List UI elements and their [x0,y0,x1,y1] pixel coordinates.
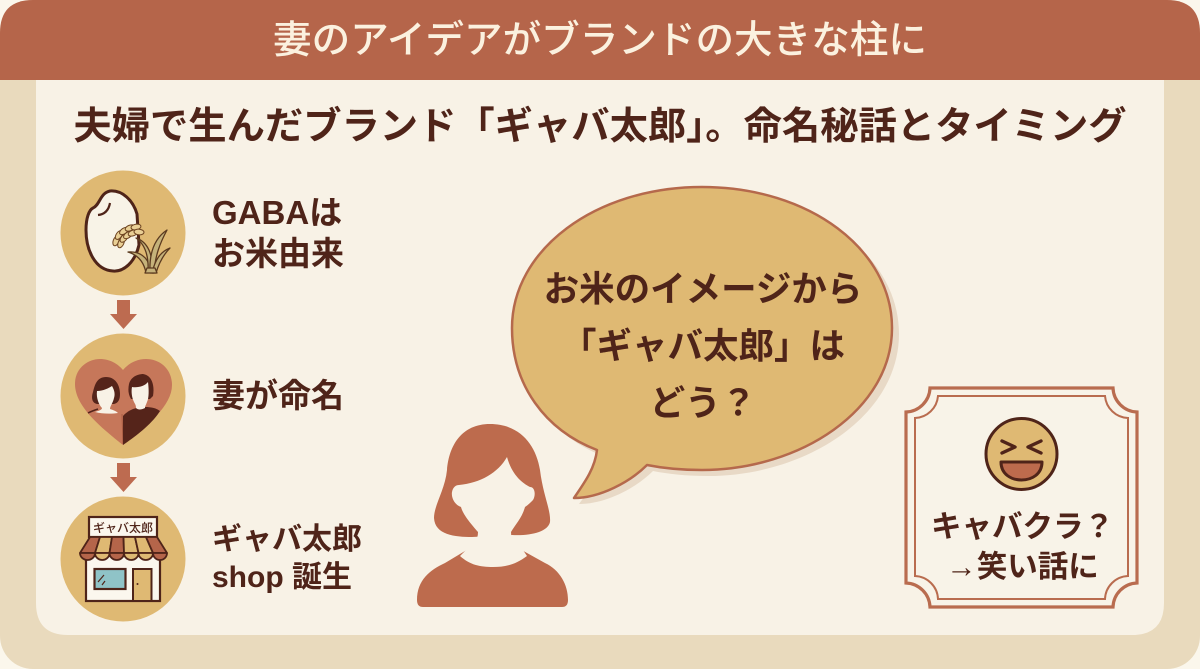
speech bubble text: どう？ [650,383,756,423]
arrow 2 [110,463,137,492]
speech bubble [512,187,899,504]
step circle: rice [60,170,186,296]
icon: laughing face [986,418,1057,490]
arrow 1 [110,300,137,329]
title: 妻のアイデアがブランドの大きな柱に [273,19,927,62]
icon: rice grain [86,191,139,271]
step circle: shop [60,496,186,622]
icon: rice ear [112,223,144,249]
subtitle: 夫婦で生んだブランド「ギャバ太郎」。命名秘話とタイミング [73,105,1127,148]
speech bubble text: お米のイメージから [544,269,862,309]
step label: shop: shop 誕生 [212,561,352,594]
icon: shop building [86,517,160,601]
step circle: couple [60,334,186,458]
icon: man [123,374,160,445]
icon: rice plant [112,223,170,273]
callout frame [906,388,1137,607]
step label: shop: ギャバ太郎 [212,523,362,556]
step label: shop [212,523,362,594]
speech bubble text [544,269,862,423]
speech bubble text: 「ギャバ太郎」は [561,326,845,366]
shop sign text: ギャバ太郎 [93,520,153,535]
callout text: キャバクラ？ [931,510,1114,544]
icon: woman [88,377,123,444]
step label: GABA: GABAは [212,194,342,231]
icon: heart [75,359,172,445]
callout text: →笑い話に [946,550,1099,584]
step label: GABA: お米由来 [212,235,344,272]
callout text [931,510,1114,584]
step label: GABA [212,194,344,272]
step label: wife: 妻が命名 [212,377,344,414]
icon: shop awning [80,537,167,560]
person silhouette [417,424,568,607]
title band [0,0,1200,80]
